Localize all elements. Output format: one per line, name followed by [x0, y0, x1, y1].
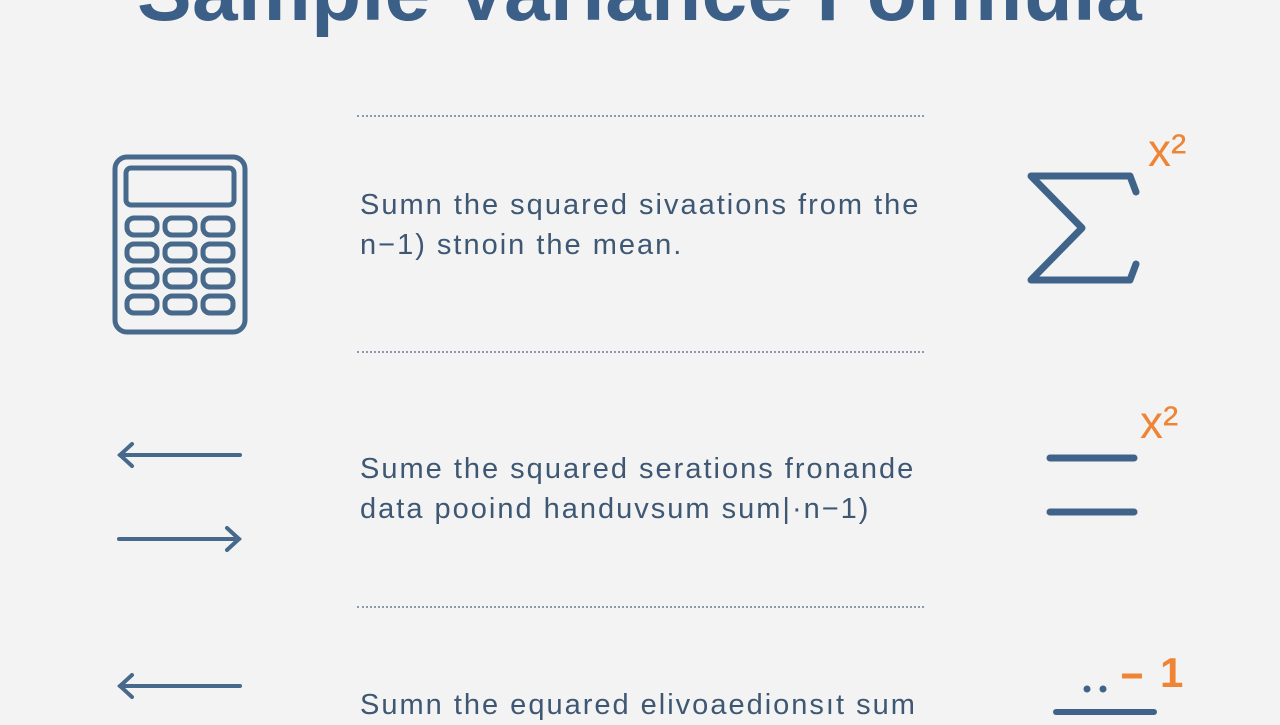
icon: sigma	[1031, 176, 1136, 280]
text block 2: data pooind handuvsum sum|·n−1)	[360, 493, 870, 525]
x squared 2: x²	[1140, 396, 1178, 448]
x squared 1: x²	[1148, 124, 1186, 176]
arrow right	[119, 528, 239, 550]
text block 1: Sumn the squared sivaations from the	[360, 189, 920, 221]
icon: calculator	[115, 157, 245, 332]
text block 2	[360, 453, 915, 525]
fraction n-1: 1	[1160, 649, 1183, 696]
text block 1: n−1) stnoin the mean.	[360, 229, 683, 261]
text block 1	[360, 189, 920, 261]
arrow left 2	[120, 675, 240, 697]
arrow left 1	[120, 444, 240, 466]
text block 3: Sumn the equared elivoaedionsıt sum	[360, 689, 917, 721]
fraction n-1	[1056, 649, 1183, 712]
text block 2: Sume the squared serations fronande	[360, 453, 915, 485]
icon: equals	[1050, 458, 1134, 512]
